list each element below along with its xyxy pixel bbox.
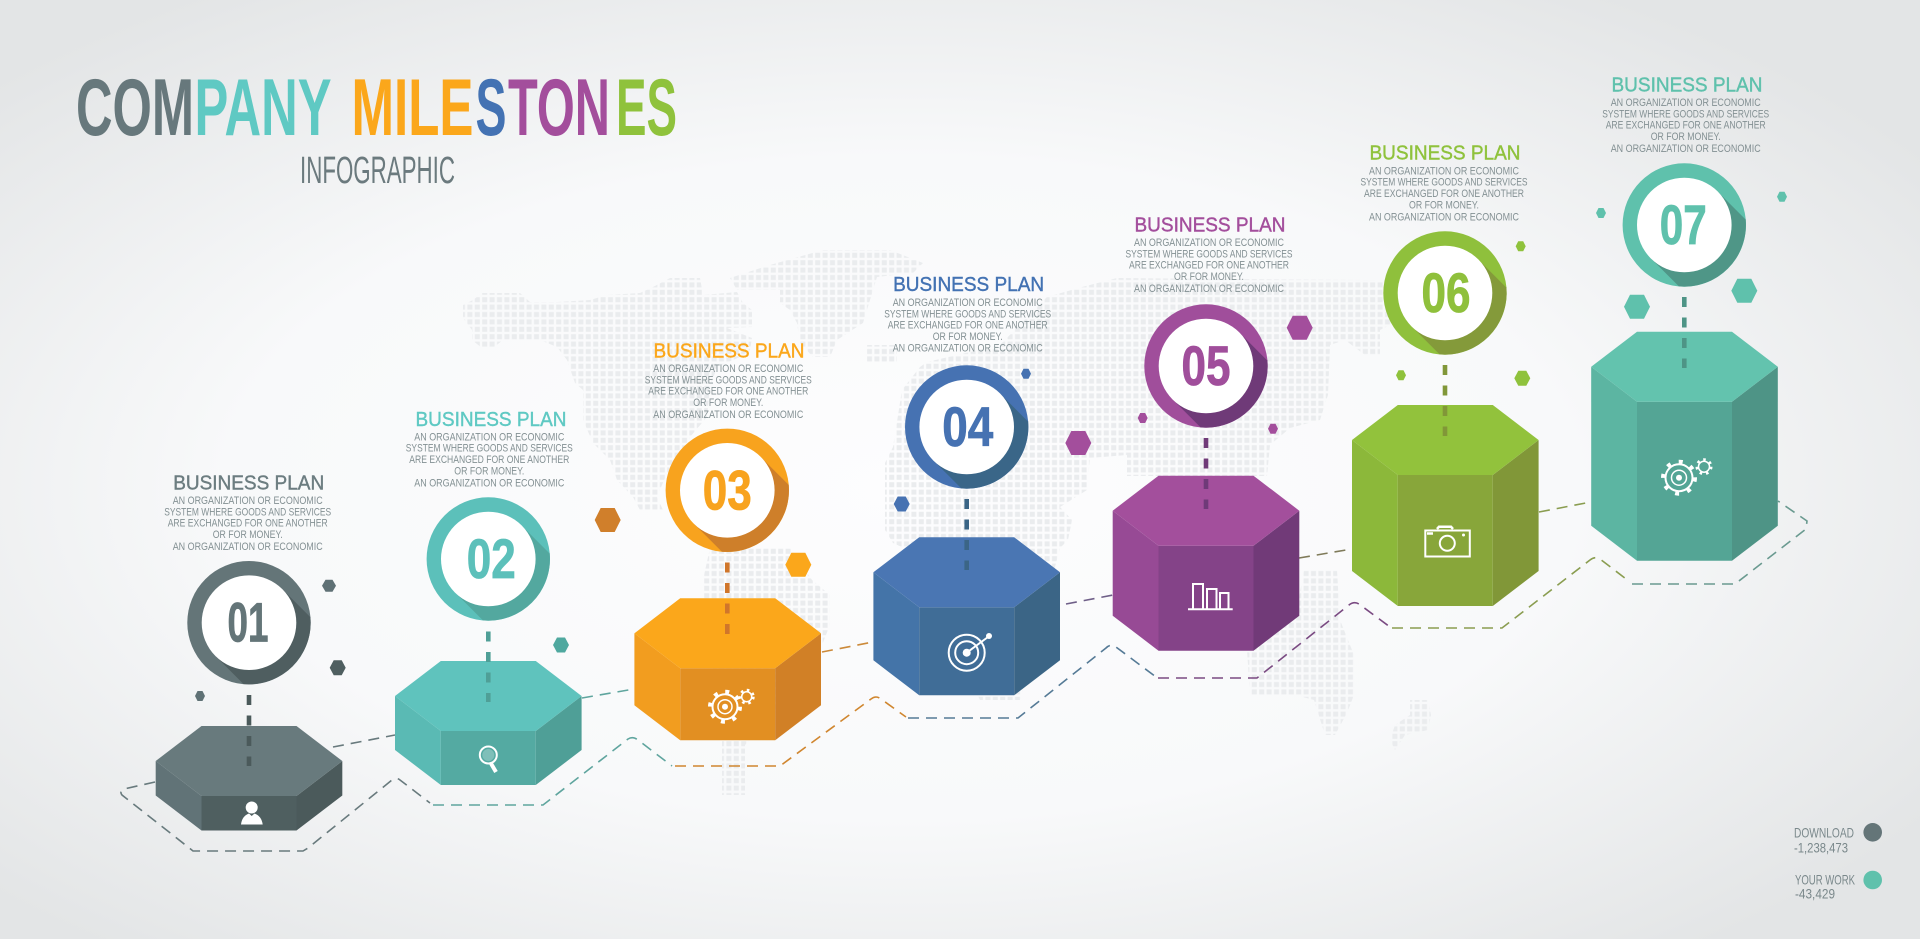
title: TON (508, 63, 610, 153)
text block 2: ARE EXCHANGED FOR ONE ANOTHER (409, 454, 569, 466)
text block 1: BUSINESS PLAN (173, 472, 324, 494)
number badge 7 (1623, 163, 1746, 287)
title: COM (76, 63, 194, 153)
box 5 (1113, 476, 1299, 651)
panel: milestone 7 (1591, 75, 1787, 561)
text block 2: AN ORGANIZATION OR ECONOMIC (414, 477, 564, 489)
text block 6: ARE EXCHANGED FOR ONE ANOTHER (1364, 188, 1524, 200)
legend item: download (1794, 823, 1882, 856)
number badge 1 (187, 561, 311, 684)
text block 3 (645, 341, 812, 421)
text block 4 (884, 274, 1051, 355)
text block 2: BUSINESS PLAN (416, 409, 566, 431)
text block 6: OR FOR MONEY. (1409, 199, 1479, 211)
number badge 3: 03 (703, 458, 752, 521)
box 7 (1591, 332, 1778, 561)
connector 4 (964, 499, 969, 570)
icon: person (241, 802, 263, 824)
hexagon accents 5 (1138, 316, 1313, 434)
title: MILE (352, 63, 474, 153)
number badge 2: 02 (467, 527, 516, 590)
icon: gears (710, 690, 753, 722)
hexagon accent 3 (785, 553, 811, 577)
text block 5: BUSINESS PLAN (1134, 214, 1286, 236)
number badge 5 (1144, 304, 1268, 428)
text block 4: AN ORGANIZATION OR ECONOMIC (893, 343, 1043, 355)
connector 2 (486, 632, 491, 702)
icon: target (949, 633, 992, 671)
dotted world map (463, 250, 1440, 795)
text block 3: BUSINESS PLAN (654, 341, 804, 363)
text block 5: ARE EXCHANGED FOR ONE ANOTHER (1129, 260, 1289, 272)
text block 7: BUSINESS PLAN (1612, 75, 1762, 97)
text block 5: OR FOR MONEY. (1174, 271, 1244, 283)
box 2 (395, 661, 582, 785)
box 1 (156, 726, 342, 830)
text block 3: ARE EXCHANGED FOR ONE ANOTHER (648, 386, 808, 398)
panel: milestone 3 (634, 341, 821, 740)
text block 6: AN ORGANIZATION OR ECONOMIC (1369, 165, 1519, 177)
legend item: your work: YOUR WORK (1795, 871, 1855, 887)
text block 2: SYSTEM WHERE GOODS AND SERVICES (406, 443, 573, 455)
title: S (476, 63, 506, 153)
text block 4: ARE EXCHANGED FOR ONE ANOTHER (888, 320, 1048, 332)
number badge 4: 04 (942, 395, 993, 458)
panel: milestone 5 (1113, 214, 1313, 651)
number badge 4 (905, 365, 1028, 489)
text block 4: BUSINESS PLAN (893, 274, 1044, 296)
panel: milestone 4 (873, 274, 1091, 695)
text block 7: AN ORGANIZATION OR ECONOMIC (1611, 143, 1761, 155)
legend (1794, 823, 1882, 902)
hexagon accents 1 (195, 580, 346, 701)
text block 1: OR FOR MONEY. (213, 529, 283, 541)
panel: milestone 2 (395, 409, 621, 785)
legend item: your work: -43,429 (1795, 886, 1835, 902)
box 4 (873, 537, 1060, 695)
connector 1 (247, 695, 251, 766)
panel: milestone 6 (1352, 143, 1539, 606)
text block 2: AN ORGANIZATION OR ECONOMIC (414, 431, 564, 443)
number badge 1: 01 (228, 591, 268, 654)
title: PANY (194, 63, 332, 153)
connector 6 (1443, 365, 1447, 436)
text block 1: SYSTEM WHERE GOODS AND SERVICES (164, 506, 331, 518)
text block 7: OR FOR MONEY. (1651, 131, 1721, 143)
text block 7: ARE EXCHANGED FOR ONE ANOTHER (1606, 120, 1766, 132)
subtitle: INFOGRAPHIC (300, 150, 455, 192)
box 3 (634, 598, 821, 740)
legend item: download: -1,238,473 (1794, 840, 1848, 856)
text block 6: SYSTEM WHERE GOODS AND SERVICES (1360, 177, 1528, 189)
icon: camera (1425, 527, 1470, 556)
legend item: your work (1795, 871, 1882, 902)
text block 1: AN ORGANIZATION OR ECONOMIC (173, 541, 323, 553)
hexagon accents 6 (1396, 241, 1530, 386)
text block 3: AN ORGANIZATION OR ECONOMIC (653, 363, 803, 375)
text block 5 (1126, 214, 1292, 295)
text block 1: AN ORGANIZATION OR ECONOMIC (173, 495, 323, 507)
text block 5: SYSTEM WHERE GOODS AND SERVICES (1126, 248, 1292, 260)
legend item: download: DOWNLOAD (1794, 824, 1854, 840)
text block 6 (1360, 143, 1528, 223)
connector 3 (725, 562, 730, 634)
number badge 5: 05 (1182, 334, 1230, 397)
text block 3: SYSTEM WHERE GOODS AND SERVICES (645, 374, 812, 386)
text block 7: AN ORGANIZATION OR ECONOMIC (1611, 97, 1761, 109)
text block 5: AN ORGANIZATION OR ECONOMIC (1134, 237, 1284, 249)
icon: bar chart (1188, 584, 1233, 609)
number badge 7: 07 (1660, 193, 1707, 256)
text block 1: ARE EXCHANGED FOR ONE ANOTHER (168, 518, 328, 530)
text block 2: OR FOR MONEY. (454, 465, 524, 477)
text block 2 (406, 409, 573, 489)
text block 3: OR FOR MONEY. (693, 397, 763, 409)
text block 3: AN ORGANIZATION OR ECONOMIC (653, 409, 803, 421)
connector 7 (1682, 297, 1687, 368)
number badge 6 (1383, 231, 1507, 355)
hexagon accents 7 (1596, 192, 1787, 319)
box 6 (1352, 405, 1539, 606)
number badge 2 (427, 497, 550, 621)
text block 4: OR FOR MONEY. (933, 331, 1003, 343)
connector 5 (1204, 438, 1208, 509)
icon: magnifier (480, 746, 497, 772)
text block 1 (164, 472, 331, 553)
text block 4: AN ORGANIZATION OR ECONOMIC (893, 297, 1043, 309)
panel: milestone 1 (156, 472, 346, 830)
text block 6: AN ORGANIZATION OR ECONOMIC (1369, 211, 1519, 223)
number badge 6: 06 (1422, 261, 1470, 324)
hexagon accents 2 (553, 508, 621, 652)
title (76, 63, 677, 153)
number badge 3 (666, 429, 789, 552)
text block 4: SYSTEM WHERE GOODS AND SERVICES (884, 308, 1051, 320)
text block 5: AN ORGANIZATION OR ECONOMIC (1134, 283, 1284, 295)
text block 7: SYSTEM WHERE GOODS AND SERVICES (1602, 108, 1769, 120)
dashed path line (121, 501, 1807, 851)
title: ES (616, 63, 677, 153)
text block 7 (1602, 75, 1769, 155)
hexagon accents 4 (894, 369, 1091, 512)
icon: gears (1663, 460, 1711, 494)
text block 6: BUSINESS PLAN (1370, 143, 1520, 165)
